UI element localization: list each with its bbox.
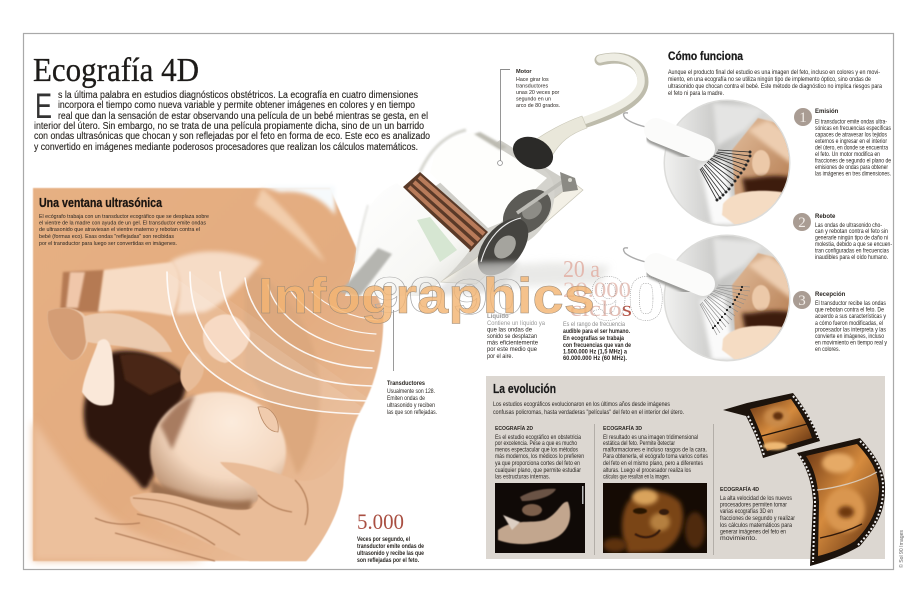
- cómo funciona intro: ultrasonido que chocan contra el bebé. Este método de diagnóstico no implica riesgos para: [668, 84, 883, 90]
- step 1: emisión: Emisión: [815, 109, 839, 115]
- evolution intro: confusas policromas, hasta verdaderas "películas" del feto en el interior del útero.: [493, 410, 684, 416]
- ventana text: bebé (formas eco). Esas ondas "reflejadas" son recibidas: [39, 234, 174, 240]
- liquid callout: [487, 314, 546, 360]
- rod and clamp: [517, 182, 562, 213]
- copper transducers: [403, 172, 488, 252]
- white corner glow: [262, 186, 335, 215]
- motor callout: transductores: [516, 84, 548, 90]
- watermark: 90: [372, 267, 444, 323]
- ventana text: por el transductor para luego ser convertidas en imágenes.: [39, 241, 177, 247]
- ear: [258, 407, 278, 432]
- intro text block: s la última palabra en estudios diagnósticos obstétricos. La ecografía en cuatro dimensiones: [58, 90, 418, 101]
- liquid callout: Líquido: [487, 314, 509, 320]
- column: ecografía 4D: ECOGRAFÍA 4D: [720, 485, 759, 493]
- column: ecografía 4D: varias ecografías 3D en: [720, 509, 773, 515]
- statistic: 20 a 20.000 ciclos: con frecuencias que van de: [563, 343, 632, 349]
- cavity shadow: [84, 351, 186, 489]
- second foot: [82, 339, 114, 406]
- belly shading: [245, 265, 320, 475]
- column: ecografía 3D: del feto en el mismo plano, pero a diferentes: [603, 461, 703, 467]
- step 2: rebote: inaudibles para el oído humano.: [815, 255, 888, 261]
- column: ecografía 3D: ECOGRAFÍA 3D: [603, 424, 642, 432]
- statistic: 5.000: transductor emite ondas de: [357, 544, 425, 550]
- number badge 2: 2: [798, 215, 806, 231]
- transductores callout: Usualmente son 128.: [387, 389, 435, 395]
- skin base: [33, 188, 383, 561]
- intro text block: real que dan la sensación de estar observando una película de un bebé mientras se gesta, en el: [58, 111, 428, 122]
- column: ecografía 3D: alturas. Luego el procesador realiza los: [603, 468, 691, 474]
- cómo funciona intro: [668, 70, 883, 97]
- column: ecografía 3D: estática del feto. Permite detectar: [603, 441, 675, 447]
- reflected rays: [700, 285, 750, 335]
- statistic: 20 a 20.000 ciclos: 60.000.000 Hz (60 MHz).: [563, 356, 627, 362]
- column: ecografía 4D: movimiento.: [720, 536, 757, 542]
- ventana text: El ecógrafo trabaja con un transductor ecográfico que se desplaza sobre: [39, 214, 209, 220]
- column: ecografía 2D: Es el estudio ecográfico en obstetricia: [495, 435, 582, 441]
- step 3: recepción: acuerdo a sus características y: [815, 314, 886, 320]
- copyright: © Sol 90 Images: [898, 529, 905, 568]
- step 1: emisión: las imágenes en tres dimensiones.: [815, 172, 891, 178]
- transductores callout: las que son reflejadas.: [387, 410, 437, 416]
- lower film section: [797, 438, 885, 566]
- step 2: rebote: Rebote: [815, 214, 836, 220]
- statistic: 20 a 20.000 ciclos: En ecografías se trabaja: [563, 336, 625, 342]
- transductores callout: Transductores: [387, 381, 426, 387]
- heading: cómo funciona: Cómo funciona: [668, 51, 744, 63]
- motor callout: arco de 80 grados.: [516, 103, 560, 109]
- step 2: rebote: tran configuradas en frecuencias: [815, 248, 889, 254]
- step 1: emisión: del útero, en donde se encuentra: [815, 146, 889, 152]
- statistic: 20 a 20.000 ciclos: 1.500.000 Hz (1,5 MHz) a: [563, 350, 628, 356]
- step 3: recepción: convierte en imágenes, incluso: [815, 334, 885, 340]
- step 3: recepción: que rebotan contra el feto. De: [815, 308, 885, 314]
- transductores callout: ultrasonido y reciben: [387, 403, 435, 409]
- motor callout: Motor: [516, 69, 532, 75]
- step 3: recepción: Recepción: [815, 292, 846, 298]
- step 3: recepción: en colores.: [815, 347, 840, 353]
- screen: [417, 217, 457, 262]
- number badge 1: 1: [799, 110, 807, 126]
- intro text block: incorpora el tiempo como nueva variable y permite obtener imágenes en colores y en tiempo: [58, 100, 415, 111]
- step 2: rebote: Las ondas de ultrasonido cho-: [815, 223, 882, 229]
- statistic: 20 a 20.000 ciclos: Es el rango de frecuencia: [563, 322, 626, 328]
- cable: [583, 57, 643, 123]
- statistic: 5.000: [357, 509, 425, 564]
- evolution intro: Los estudios ecográficos evolucionaron en los últimos años desde imágenes: [493, 402, 670, 408]
- column: ecografía 4D: generar imágenes del feto en: [720, 530, 786, 536]
- evolution heading: La evolución: [493, 381, 556, 396]
- film strip: [723, 393, 885, 566]
- panel: la evolución: [258, 265, 905, 568]
- step 2: rebote: [793, 213, 892, 261]
- ventana heading: Una ventana ultrasónica: [39, 196, 163, 210]
- statistic: 5.000: ultrasonido y recibe las que: [357, 551, 425, 557]
- motor callout: Hace girar los: [516, 77, 549, 83]
- step 3: recepción: El transductor recibe las ondas: [815, 301, 886, 307]
- baby thigh and foot: [48, 308, 172, 360]
- column: ecografía 2D: más modernos, los médicos lo prefieren: [495, 454, 584, 460]
- column: ecografía 3D: malformaciones e incluso rasgos de la cara.: [603, 448, 707, 454]
- transductores callout: Emiten ondas de: [387, 396, 426, 402]
- step 2: rebote: molestia, debido a que se encuen-: [815, 242, 892, 248]
- liquid callout: sonido se desplazan: [487, 334, 537, 340]
- cómo funciona intro: miento, en una ecografía no se utiliza ningún tipo de implemento óptico, sino ondas de: [668, 77, 872, 83]
- panel: photo of mother and baby: [33, 186, 383, 561]
- upper baby folds: [60, 270, 104, 312]
- 3D ultrasound image: [603, 483, 707, 553]
- column: ecografía 2D: cualquier plano, que permite estudiar: [495, 468, 581, 474]
- number badge 3: 3: [798, 293, 806, 309]
- column: ecografía 2D: por excelencia. Pese a que es mucho: [495, 441, 578, 447]
- upper film section: [723, 393, 820, 458]
- step 2: rebote: can y rebotan contra el feto sin: [815, 229, 888, 235]
- column: ecografía 3D: El resultado es una imagen tridimensional: [603, 435, 698, 441]
- motor callout: unas 20 veces por: [516, 90, 560, 96]
- transductores callout: [387, 310, 437, 416]
- step 1: emisión: [794, 108, 892, 178]
- intro text block: y convertido en imágenes mediante poderosos procesadores que realizan los cálculos matemáticos.: [34, 142, 418, 153]
- column: ecografía 4D: los cálculos matemáticos para: [720, 523, 793, 529]
- statistic: 5.000: son reflejadas por el feto.: [357, 558, 419, 564]
- column: ecografía 4D: procesadores permiten tomar: [720, 502, 787, 508]
- watermark: Infographics: [258, 268, 595, 324]
- step 3: recepción: procesador las interpreta y las: [815, 328, 886, 334]
- statistic: 20 a 20.000 ciclos: 20.000: [563, 277, 631, 302]
- column: ecografía 2D: menos espectacular que los métodos: [495, 448, 578, 454]
- column: ecografía 4D: fracciones de segundo y realizar: [720, 516, 795, 522]
- watermark: 90: [590, 265, 665, 334]
- supporting hand and arm: [130, 450, 343, 561]
- step 1: emisión: sónicas en frecuencias específicas: [815, 126, 891, 132]
- tray: [400, 140, 583, 282]
- step 1: emisión: capaces de atravesar los tejidos: [815, 132, 887, 138]
- device: ultrasound probe: [340, 57, 643, 296]
- black disc: [508, 131, 558, 175]
- step 3: recepción: en movimiento en tiempo real y: [815, 340, 887, 346]
- title: Ecografía 4D: [33, 52, 199, 89]
- statistic: 5.000: Veces por segundo, el: [357, 537, 410, 543]
- liquid callout: más eficientemente: [487, 340, 539, 346]
- drum pale disc: [471, 154, 569, 260]
- intro text block: con ondas ultrasónicas que chocan y son reflejadas por el feto en forma de eco. Este eco es analizado: [34, 131, 430, 142]
- step 1: emisión: emisiones de ondas para obtener: [815, 165, 888, 171]
- ultrasound arcs: [167, 272, 378, 414]
- column: ecografía 2D: ya que proporciona cortes del feto en: [495, 461, 580, 467]
- step 3: recepción: [793, 291, 887, 353]
- column: ecografía 3D: cálculos que resultan en la imagen.: [603, 474, 670, 480]
- drop cap: E: [35, 87, 52, 126]
- column: ecografía 3D: [603, 424, 708, 480]
- step 1: emisión: fracciones de segundo el plano de: [815, 158, 892, 164]
- column: ecografía 2D: las estructuras internas.: [495, 474, 550, 480]
- liquid callout: por este medio que: [487, 347, 538, 353]
- evolution intro: [493, 402, 684, 416]
- lower shell stripes: [340, 248, 392, 296]
- emission rays: [700, 150, 751, 201]
- statistic: 20 a 20.000 ciclos: [563, 257, 632, 362]
- column: ecografía 2D: [495, 424, 795, 553]
- motor callout: segundo en un: [516, 96, 551, 102]
- white drum: [430, 132, 547, 228]
- statistic: 20 a 20.000 ciclos: 20 a: [563, 257, 600, 283]
- ventana text: el vientre de la madre con ayuda de un gel. El transductor emite ondas: [39, 220, 206, 226]
- connector: [535, 116, 587, 156]
- baby hand: [180, 352, 204, 392]
- front gear: [468, 209, 538, 285]
- cómo funciona intro: Aunque el producto final del estudio es una imagen del feto, incluso en colores y en movi-: [668, 70, 880, 76]
- column: ecografía 4D: [720, 485, 795, 542]
- liquid callout: Contiene un líquido ya: [487, 321, 546, 327]
- column: ecografía 2D: ECOGRAFÍA 2D: [495, 424, 533, 432]
- circle diagram: emission: [624, 100, 800, 230]
- column: ecografía 4D: La alta velocidad de los nuevos: [720, 496, 792, 502]
- column: ecografía 3D: Para obtenerla, el ecógrafo toma varios cortes: [603, 454, 708, 460]
- motor callout: [498, 69, 560, 165]
- step 1: emisión: el feto. Un motor modifica en: [815, 152, 880, 158]
- rear gear: [494, 180, 560, 244]
- liquid callout: por el aire.: [487, 354, 513, 360]
- circle diagram: reception: [624, 234, 800, 365]
- statistic: 20 a 20.000 ciclos: audible para el ser humano.: [563, 329, 630, 335]
- back shell curve: [420, 130, 466, 172]
- intro text block: interior del útero. Sin embargo, no se trata de una película propiamente dicha, sino de un un barrido: [34, 121, 424, 132]
- baby head: [150, 392, 286, 512]
- cómo funciona intro: el feto ni para la madre.: [668, 91, 724, 97]
- liquid callout: que las ondas de: [487, 328, 533, 334]
- intro text block: [34, 87, 430, 153]
- 2D ultrasound image: [495, 483, 585, 553]
- ventana text: de ultrasonido que atraviesan el vientre materno y rebotan contra el: [39, 227, 200, 233]
- step 1: emisión: externos e ingresar en el interior: [815, 139, 887, 145]
- left white cap: [345, 183, 470, 296]
- step 2: rebote: generarle ningún tipo de daño ni: [815, 236, 888, 242]
- baby torso: [98, 262, 179, 316]
- statistic: 5.000: 5.000: [357, 509, 404, 534]
- watermark: 90: [452, 269, 524, 325]
- small foot: [203, 314, 250, 363]
- step 1: emisión: El transductor emite ondas ultra-: [815, 120, 887, 126]
- ventana text: [39, 214, 209, 247]
- step 3: recepción: a cómo fueron modificadas, el: [815, 321, 883, 327]
- watermark: [258, 265, 665, 334]
- statistic: 20 a 20.000 ciclos: ciclo s: [570, 296, 632, 321]
